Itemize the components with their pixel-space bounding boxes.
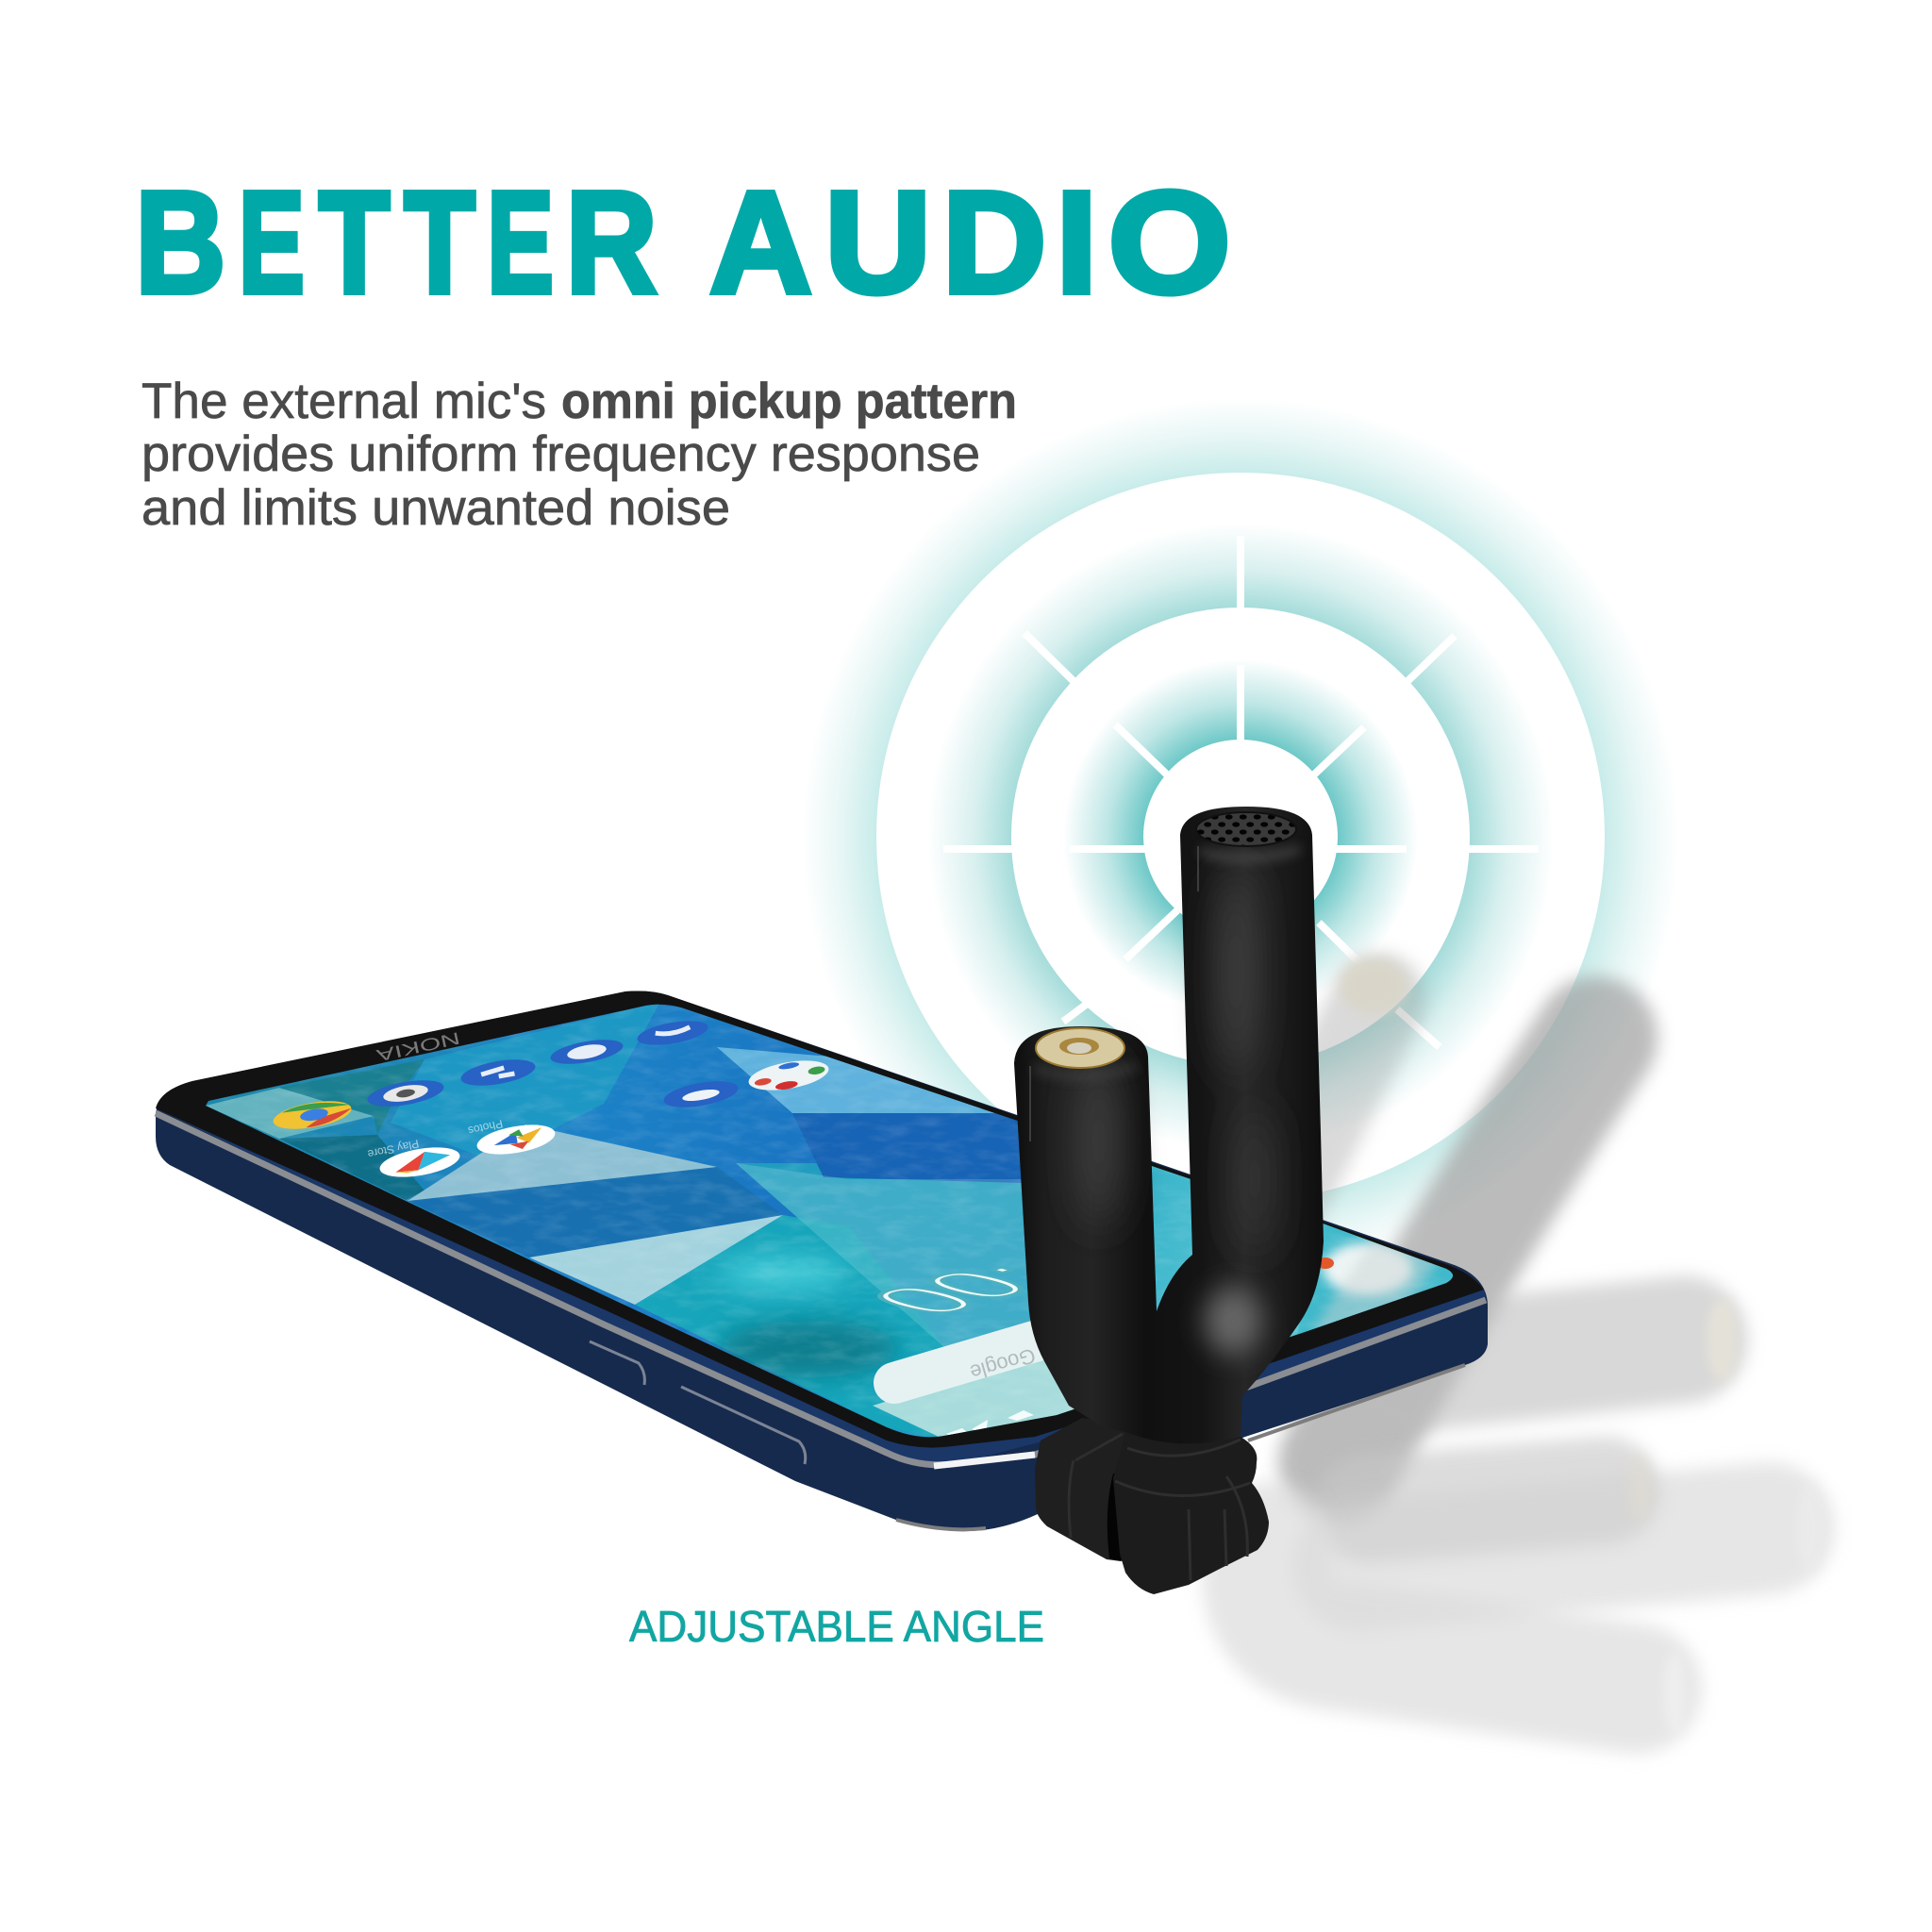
title: U bbox=[824, 161, 931, 324]
orange app dot bbox=[1321, 1257, 1334, 1269]
motion ghost images of microphone bbox=[1259, 958, 1823, 1735]
mic grille bbox=[1196, 812, 1296, 846]
search bar logo: Google bbox=[967, 1343, 1039, 1385]
mic U-shaped body bbox=[1014, 807, 1324, 1443]
tube seams bbox=[1030, 846, 1198, 1141]
chrome icon bbox=[274, 1101, 351, 1129]
ghost position six bbox=[1267, 1547, 1637, 1689]
phone bezel bbox=[156, 991, 1484, 1448]
ghost position four bbox=[1368, 1491, 1606, 1509]
side button two bbox=[681, 1387, 806, 1464]
mic collar lines bbox=[1115, 1440, 1250, 1580]
title: E bbox=[487, 161, 554, 324]
mic lower ball bbox=[1113, 1432, 1269, 1594]
screen wallpaper facets bbox=[206, 1002, 1453, 1443]
shoulder highlight small tube bbox=[1034, 1066, 1137, 1076]
photos icon bbox=[368, 1080, 443, 1107]
video icon bbox=[664, 1081, 738, 1108]
title: A bbox=[709, 161, 812, 324]
navigation icons bbox=[946, 1410, 1034, 1435]
app labels: Photos bbox=[467, 1117, 504, 1138]
mic gold jack bbox=[1036, 1028, 1124, 1068]
adjustable angle label: ADJUSTABLE ANGLE bbox=[629, 1602, 1044, 1651]
mic clip gap bbox=[1108, 1472, 1123, 1561]
ghost position three bbox=[1415, 1340, 1684, 1368]
ghost cap highlights bbox=[1340, 958, 1823, 1735]
brand label: NOKIA bbox=[375, 1028, 461, 1065]
description text: and limits unwanted noise bbox=[142, 480, 730, 536]
app labels bbox=[368, 1120, 503, 1157]
title: I bbox=[1056, 161, 1097, 324]
ghost position two bbox=[1340, 1038, 1596, 1462]
title: O bbox=[1108, 161, 1231, 324]
ghost position one bbox=[1259, 1000, 1379, 1236]
mic clip bbox=[1035, 1418, 1132, 1561]
description text: provides uniform frequency response bbox=[142, 426, 980, 482]
title: B bbox=[135, 161, 225, 324]
description text: The external mic's bbox=[142, 374, 546, 429]
omnidirectional pickup pattern rings bbox=[802, 398, 1679, 1275]
search bar bbox=[894, 1338, 1047, 1383]
title: E bbox=[239, 161, 305, 324]
play store icon bbox=[379, 1147, 460, 1177]
phone lower edge bbox=[896, 1365, 1465, 1529]
mic highlights bbox=[1082, 868, 1268, 1255]
title: R bbox=[566, 161, 658, 324]
title bbox=[135, 161, 1231, 324]
microphone bbox=[1014, 807, 1324, 1594]
side button one bbox=[590, 1341, 644, 1385]
description text bbox=[142, 374, 1017, 536]
contacts icon bbox=[551, 1040, 623, 1064]
pinwheel icon bbox=[477, 1124, 555, 1155]
ghost position five bbox=[1358, 1528, 1769, 1566]
mic junction highlight bbox=[1205, 1287, 1261, 1355]
mic clip edge bbox=[1069, 1434, 1123, 1538]
messages icon bbox=[460, 1059, 536, 1086]
description text: omni pickup pattern bbox=[561, 374, 1017, 429]
shoulder highlight big tube bbox=[1200, 849, 1300, 858]
app labels: Play Store bbox=[366, 1137, 420, 1161]
title: D bbox=[942, 161, 1046, 324]
phone silver band bbox=[156, 1113, 1486, 1465]
phone screen bbox=[206, 1004, 1453, 1438]
silver band highlight bbox=[934, 1455, 1035, 1466]
phone body bbox=[156, 991, 1488, 1531]
title: T bbox=[319, 161, 390, 324]
ghost reflection over screen bbox=[1340, 1236, 1415, 1349]
phone bbox=[156, 991, 1488, 1531]
dialer icon bbox=[638, 1021, 708, 1045]
clock digits: :00 bbox=[841, 1255, 1085, 1323]
home screen icons bbox=[271, 1017, 1334, 1269]
phone top blue strip bbox=[156, 1108, 1486, 1465]
video icon glyph bbox=[682, 1090, 720, 1101]
folder icon bbox=[749, 1060, 828, 1091]
title: T bbox=[404, 161, 475, 324]
wallpaper texture bbox=[219, 1007, 1449, 1436]
